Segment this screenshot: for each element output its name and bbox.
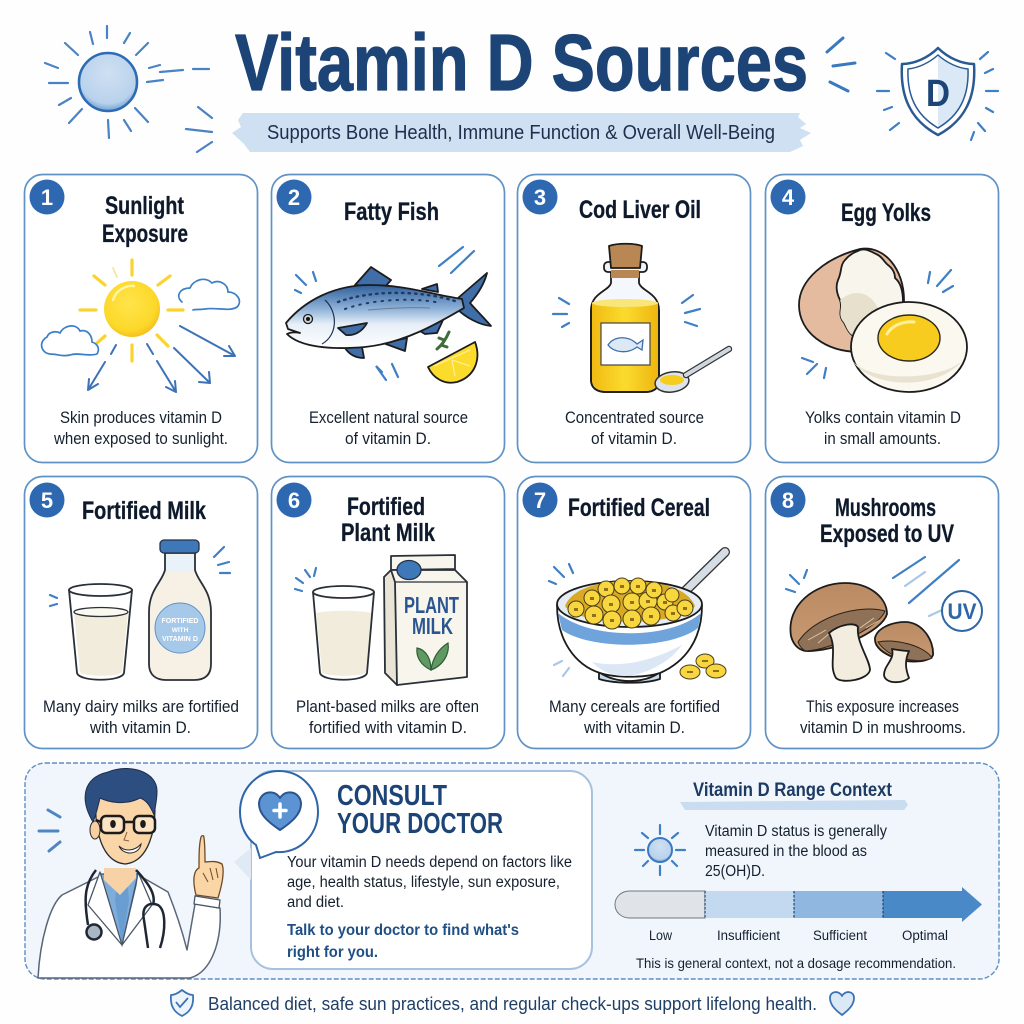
footer message: Balanced diet, safe sun practices, and regular check-ups support lifelong health. — [208, 994, 817, 1014]
icon: plant milk carton: MILK — [412, 613, 453, 639]
description: of vitamin D. — [591, 430, 677, 448]
icon: shield with D — [877, 48, 998, 140]
icon: footer shield — [171, 990, 193, 1016]
icon: milk bottle with label: VITAMIN D — [162, 636, 198, 643]
subtitle banner: Supports Bone Health, Immune Function & Overall Well-Being — [267, 121, 775, 144]
description: with vitamin D. — [583, 719, 685, 737]
heading: Fortified Milk: Fortified Milk — [82, 497, 206, 525]
description — [43, 698, 239, 737]
icon: milk bottle with label — [50, 540, 230, 680]
subtitle banner — [232, 113, 811, 152]
number badge 2: 2 — [288, 185, 300, 210]
decorative title marks — [827, 38, 855, 91]
text: consult body — [287, 854, 572, 911]
description — [53, 409, 228, 448]
description: Many cereals are fortified — [549, 698, 720, 716]
heading: range context: Vitamin D Range Context — [693, 780, 893, 801]
panel: bottom consult and range panel — [25, 763, 999, 979]
panel: card 3 cod liver oil — [518, 174, 750, 462]
description — [805, 409, 961, 448]
icon: milk bottle with label: FORTIFIED — [162, 616, 199, 625]
number badge 3 — [522, 180, 558, 214]
icon: oil bottle with spoon — [553, 244, 729, 394]
description: This exposure increases — [806, 698, 959, 716]
icon: shield with D: D — [926, 73, 950, 115]
heading: Sunlight Exposure — [102, 192, 188, 248]
panel: card 7 fortified cereal — [518, 476, 750, 748]
heading: Mushrooms Exposed to UV — [820, 494, 954, 548]
range bar labels: Optimal — [902, 928, 948, 943]
panel: card 2 fatty fish — [272, 174, 504, 462]
heading: Egg Yolks: Egg Yolks — [841, 199, 931, 227]
icon: egg and halved egg — [799, 249, 967, 392]
description — [800, 698, 966, 737]
number badge 7: 7 — [534, 488, 546, 513]
description: Many dairy milks are fortified — [43, 698, 239, 716]
number badge 1: 1 — [41, 185, 53, 210]
panel: card 1 sunlight exposure — [24, 174, 258, 462]
icon: footer heart — [830, 992, 854, 1015]
icon: UV badge — [942, 591, 982, 631]
description: fortified with vitamin D. — [309, 719, 467, 737]
icon: small sun — [635, 825, 685, 875]
icon: fish with lemon — [286, 247, 491, 383]
text: consult body: Your vitamin D needs depend on factors like — [287, 854, 572, 871]
icon: cereal bowl with spoon — [549, 552, 726, 683]
number badge 3: 3 — [534, 185, 546, 210]
number badge 4: 4 — [782, 185, 795, 210]
heading: Sunlight Exposure: Exposure — [102, 220, 188, 248]
heading: Fatty Fish: Fatty Fish — [344, 198, 439, 226]
description — [565, 409, 704, 448]
heading: Fortified Plant Milk — [341, 493, 435, 547]
icon: plant milk carton — [295, 555, 467, 685]
description: Concentrated source — [565, 409, 704, 427]
heading: Mushrooms Exposed to UV: Exposed to UV — [820, 520, 954, 548]
description: Excellent natural source — [309, 409, 468, 427]
number badge 8 — [770, 482, 806, 518]
heading: Sunlight Exposure: Sunlight — [105, 192, 185, 220]
callout: consult your doctor — [234, 771, 592, 969]
description — [309, 409, 468, 448]
number badge 2 — [276, 180, 312, 214]
text: status description: Vitamin D status is generally — [705, 823, 887, 840]
description: with vitamin D. — [89, 719, 191, 737]
description: Yolks contain vitamin D — [805, 409, 961, 427]
number badge 1 — [30, 180, 64, 214]
number badge 6: 6 — [288, 488, 300, 513]
description: Skin produces vitamin D — [60, 409, 222, 427]
heading: Mushrooms Exposed to UV: Mushrooms — [835, 494, 936, 522]
title: Vitamin D Sources — [235, 18, 808, 107]
icon: speech bubble with heart — [240, 771, 318, 858]
number badge 8: 8 — [782, 488, 794, 513]
range bar labels: Low — [649, 928, 672, 943]
panel: card 5 fortified milk — [24, 476, 258, 748]
description — [296, 698, 479, 737]
number badge 4 — [770, 180, 806, 214]
icon: sun with clouds and arrows — [42, 260, 239, 392]
text: consult body: age, health status, lifestyle, sun exposure, — [287, 874, 560, 891]
icon: UV badge: UV — [948, 599, 977, 624]
icon: glass of plant milk — [313, 586, 374, 680]
heading: range context — [680, 780, 908, 810]
panel: card 6 fortified plant milk — [272, 476, 504, 748]
description: of vitamin D. — [345, 430, 431, 448]
heading: Fortified Cereal: Fortified Cereal — [568, 494, 710, 522]
description — [549, 698, 720, 737]
heading: consult your doctor: CONSULT — [337, 780, 447, 812]
text: status description: measured in the blood as — [705, 843, 867, 860]
description: in small amounts. — [824, 430, 941, 448]
doctor illustration — [38, 769, 223, 978]
number badge 6 — [276, 482, 312, 518]
heading: Fortified Plant Milk: Plant Milk — [341, 519, 435, 547]
icon: mushrooms — [786, 557, 959, 682]
description: vitamin D in mushrooms. — [800, 719, 966, 737]
icon: glass of milk — [69, 584, 132, 680]
description: Plant-based milks are often — [296, 698, 479, 716]
icon: header sun — [45, 26, 212, 152]
text: talk to your doctor: right for you. — [287, 944, 378, 961]
heading: consult your doctor — [337, 780, 503, 840]
heading: Cod Liver Oil: Cod Liver Oil — [579, 196, 701, 224]
text: status description: 25(OH)D. — [705, 863, 765, 880]
description: when exposed to sunlight. — [53, 430, 228, 448]
range bar labels: Sufficient — [813, 928, 867, 943]
number badge 7 — [522, 482, 558, 518]
range bar labels — [649, 928, 948, 943]
heading: Fortified Plant Milk: Fortified — [347, 493, 425, 521]
icon: plant milk carton: PLANT — [404, 592, 459, 618]
text: talk to your doctor: Talk to your doctor to find what's — [287, 922, 519, 939]
panel: card 8 mushrooms exposed to UV — [766, 476, 998, 748]
panel: card 4 egg yolks — [766, 174, 998, 462]
icon: milk bottle with label: WITH — [172, 627, 189, 634]
text: status description — [705, 823, 887, 880]
text: dosage note: This is general context, not a dosage recommendation. — [636, 955, 956, 971]
heading: consult your doctor: YOUR DOCTOR — [337, 808, 503, 840]
text: consult body: and diet. — [287, 894, 344, 911]
text: talk to your doctor — [287, 922, 519, 961]
range bar labels: Insufficient — [717, 928, 780, 943]
number badge 5: 5 — [41, 488, 53, 513]
range bar chart — [615, 887, 982, 922]
number badge 5 — [30, 482, 64, 518]
panel: vitamin D range context — [615, 780, 982, 971]
